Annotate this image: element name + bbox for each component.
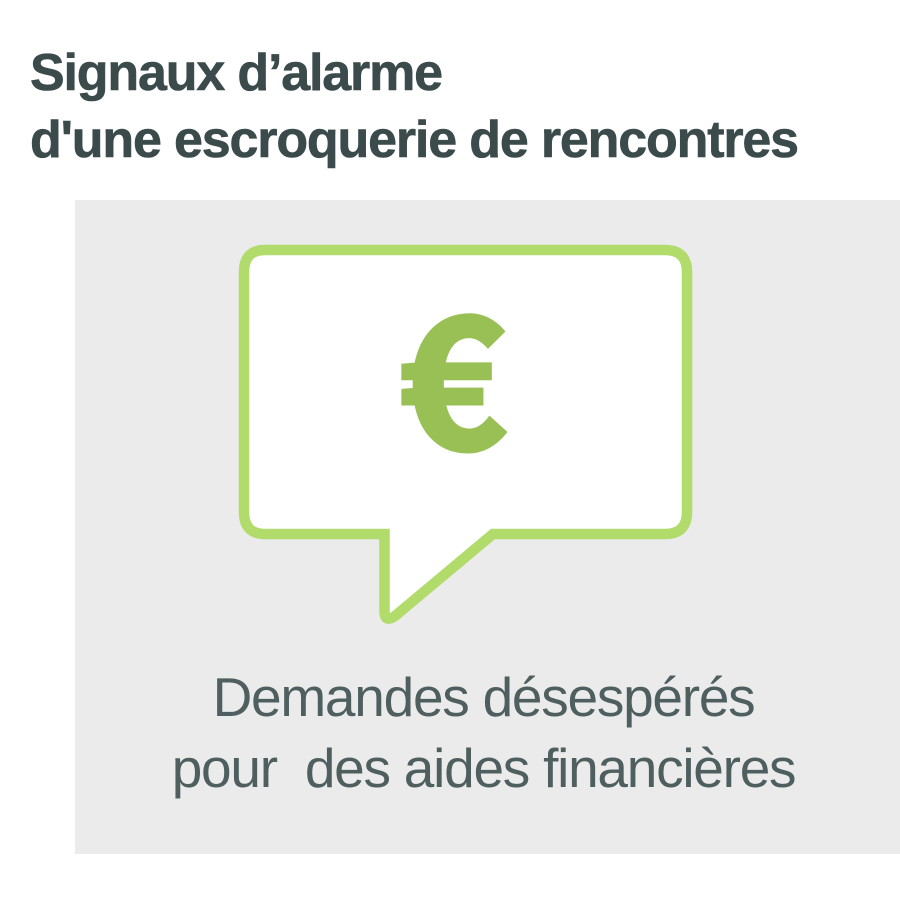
title xyxy=(30,44,798,169)
title: d'une escroquerie de rencontres xyxy=(30,111,798,169)
caption xyxy=(172,666,795,799)
panel: warning sign xyxy=(75,200,900,854)
title: Signaux d’alarme xyxy=(30,44,442,102)
caption: pour des aides financières xyxy=(172,737,795,799)
icon: speech bubble with euro xyxy=(238,239,692,624)
icon: speech bubble with euro: € xyxy=(399,239,506,502)
caption: Demandes désespérés xyxy=(213,666,754,728)
